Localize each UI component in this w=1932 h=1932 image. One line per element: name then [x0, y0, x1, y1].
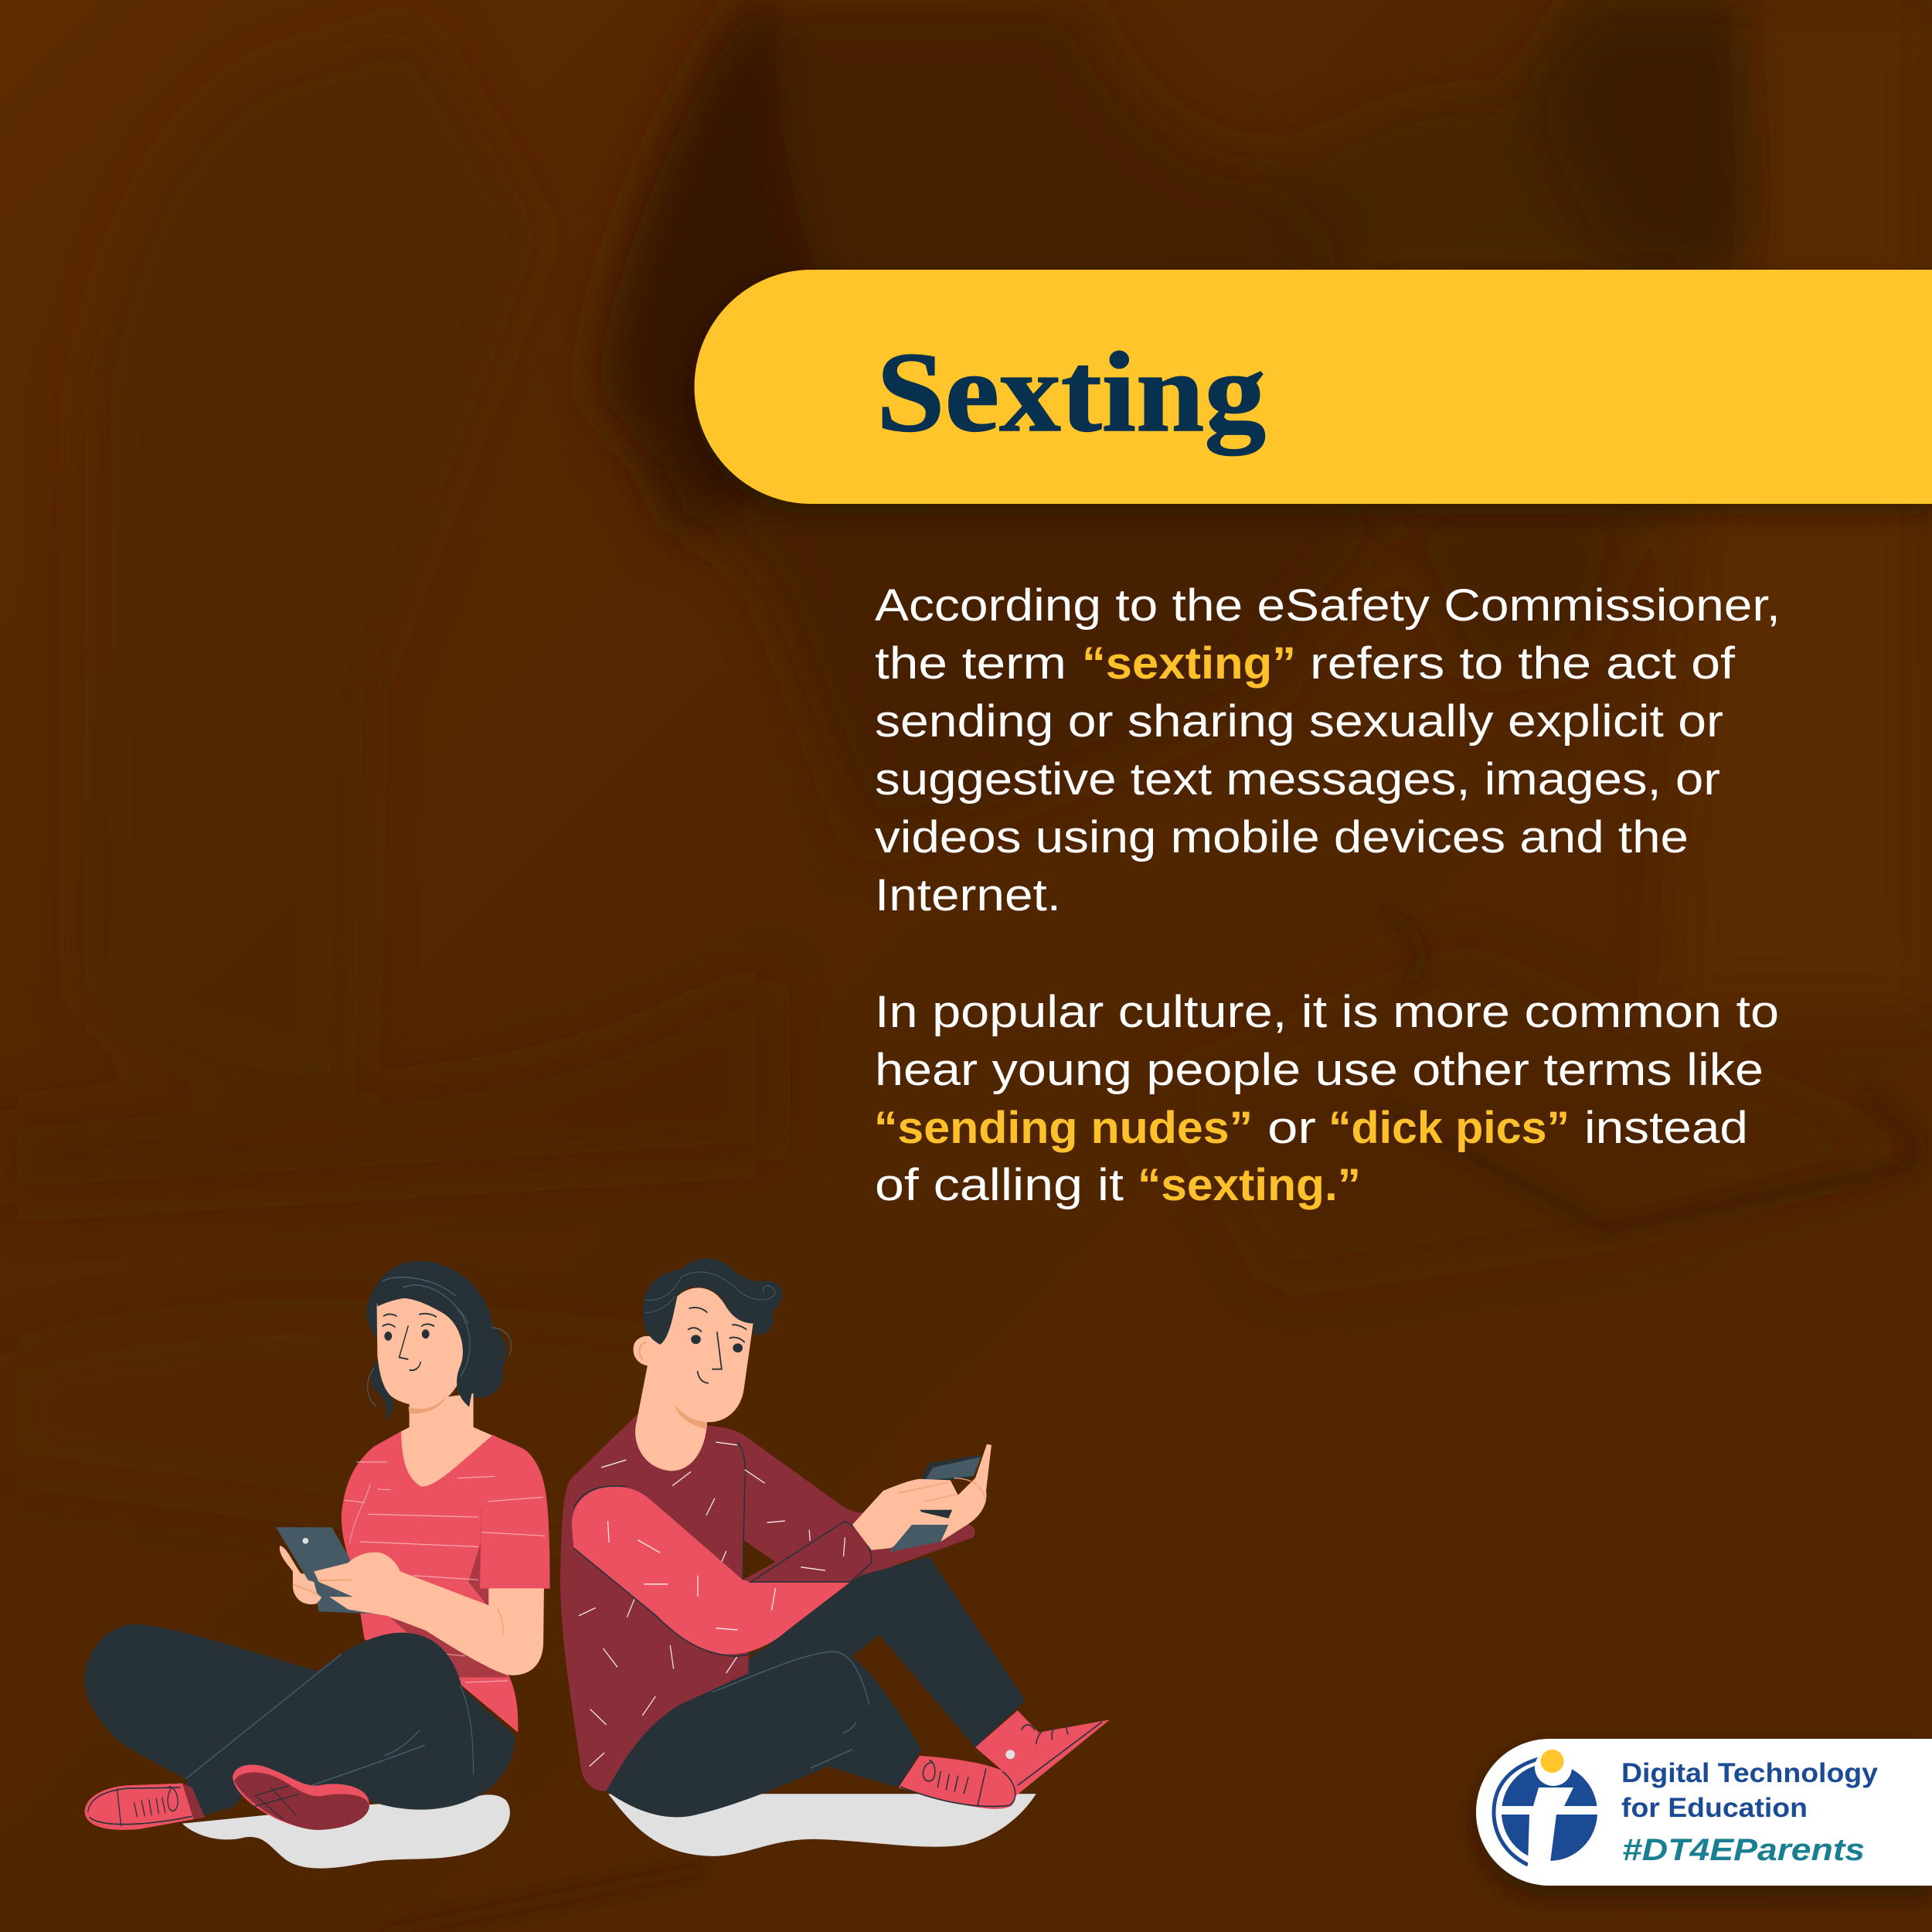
hands [852, 1444, 992, 1550]
neck shadow [675, 1405, 707, 1430]
floor shadow [182, 1794, 510, 1869]
shoe sole [233, 1765, 369, 1830]
logo text: #DT4EParents [1622, 1833, 1865, 1867]
sweater flecks [579, 1442, 845, 1767]
logo badge [1476, 1739, 1932, 1886]
text block: popular culture terms: of calling it [875, 1160, 1124, 1210]
logo text: Digital Technology [1621, 1758, 1879, 1788]
hair lock left [371, 1359, 393, 1420]
face and neck [634, 1287, 753, 1471]
facial features [383, 1314, 437, 1370]
text block: definition of sexting: sending or sharing sexually explicit or [875, 696, 1723, 747]
forearm cuff [750, 1522, 872, 1582]
text block: definition of sexting: suggestive text messages, images, or [875, 754, 1720, 804]
illustration: man with phone [560, 1258, 1110, 1856]
text block: popular culture terms: “sending nudes” [874, 1103, 1253, 1153]
back leg [749, 1556, 1026, 1747]
logo text [1621, 1758, 1879, 1867]
title banner [694, 270, 1932, 504]
icon: Digital Technology for Education logo [1494, 1749, 1600, 1866]
arm and hand [314, 1553, 544, 1675]
text block: definition of sexting: the term [875, 638, 1066, 689]
illustration: woman with phone [84, 1261, 550, 1869]
back shoe [975, 1710, 1110, 1796]
text block: popular culture terms: In popular culture, it is more common to [875, 987, 1779, 1037]
face [377, 1298, 465, 1406]
floor shadow [608, 1794, 1036, 1856]
phone [276, 1527, 374, 1614]
text block: definition of sexting: Internet. [875, 870, 1061, 920]
sweater [560, 1414, 975, 1791]
text block: popular culture terms: or [1267, 1103, 1316, 1153]
text block: definition of sexting: “sexting” [1082, 638, 1296, 689]
hair highlights [368, 1277, 512, 1406]
hair [366, 1261, 506, 1406]
text block: definition of sexting [875, 580, 1781, 920]
neck shadow [408, 1396, 447, 1413]
front shoe [899, 1756, 1015, 1809]
text block: definition of sexting: According to the eSafety Commissioner, [875, 580, 1781, 631]
front leg [607, 1651, 921, 1817]
text block: popular culture terms: instead [1584, 1103, 1748, 1153]
logo text: for Education [1621, 1793, 1808, 1823]
shirt shadow [390, 1542, 509, 1677]
title: Sexting [876, 329, 1266, 456]
pants [84, 1624, 515, 1817]
hair [643, 1258, 782, 1345]
neck [401, 1393, 493, 1488]
text block: definition of sexting: videos using mobile devices and the [875, 812, 1689, 862]
hair fringe [377, 1276, 487, 1406]
text block: definition of sexting: refers to the act of [1310, 638, 1736, 689]
back hand [280, 1546, 322, 1604]
text block: popular culture terms: “sexting.” [1138, 1160, 1361, 1210]
shirt stripes [345, 1462, 545, 1682]
red arm [572, 1487, 850, 1655]
shirt [342, 1431, 550, 1733]
text block: popular culture terms: “dick pics” [1328, 1103, 1570, 1153]
back hand fingers [293, 1576, 321, 1604]
left shoe [84, 1784, 205, 1830]
text block: popular culture terms [874, 987, 1779, 1210]
text block: popular culture terms: hear young people use other terms like [875, 1045, 1764, 1095]
phone [920, 1454, 981, 1482]
facial features [639, 1308, 747, 1383]
sleeve edge [480, 1508, 550, 1588]
gap between arm and body [743, 1539, 775, 1580]
